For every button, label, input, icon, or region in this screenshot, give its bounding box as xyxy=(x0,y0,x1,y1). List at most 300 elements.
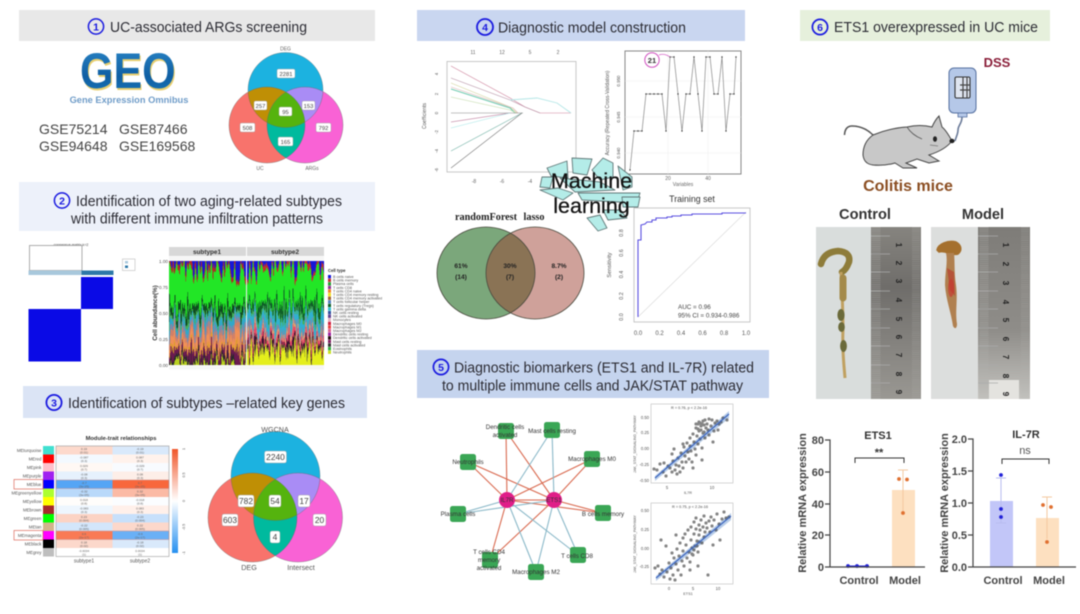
scatter plot: IL7R vs JAK/STAT: 0.50 xyxy=(641,415,650,420)
heatmap: module-trait relationships: (0.3) xyxy=(137,459,143,463)
line chart: RFE accuracy xyxy=(605,51,741,188)
photo: control colon with ruler: 8 xyxy=(894,372,903,377)
venn: DEG, UC, ARGs: DEG xyxy=(280,46,291,52)
heading 3 xyxy=(23,386,367,418)
line chart: lasso coefficients: 5 xyxy=(529,50,532,56)
heatmap: module-trait relationships: -0.6 xyxy=(137,532,143,536)
scatter plot: IL7R vs JAK/STAT: 5 xyxy=(666,485,669,490)
icon: machine learning brain: learning xyxy=(553,194,630,218)
bar chart: IL-7R xyxy=(939,429,1076,587)
venn: WGCNA, DEG, Intersect: 17 xyxy=(299,496,309,506)
dataset accession list: GSE169568 xyxy=(119,138,195,154)
ROC curve: training set: 0.2 xyxy=(619,292,625,300)
photo: control colon with ruler: 9 xyxy=(894,390,903,395)
line chart: lasso coefficients: -8 xyxy=(472,179,476,185)
network diagram: biomarkers and immune cells: Neutrophils xyxy=(452,459,484,466)
bar chart: IL-7R: 2.0 xyxy=(952,434,967,446)
venn: DEG, UC, ARGs xyxy=(229,46,343,172)
ROC curve: training set: 0.6 xyxy=(698,331,707,337)
photo: model colon with ruler: 2 xyxy=(1001,262,1010,267)
venn: randomForest vs lasso: 30% xyxy=(503,263,517,270)
venn: WGCNA, DEG, Intersect: 20 xyxy=(315,515,324,525)
photo: control colon with ruler: 2 xyxy=(894,261,903,266)
scatter plot: ETS1 vs JAK/STAT: R = 0.75, p < 2.2e-16 xyxy=(672,505,708,509)
icon: machine learning brain: Machine xyxy=(551,169,632,193)
bar chart: IL-7R: IL-7R xyxy=(1012,429,1040,441)
heatmap: module-trait relationships: MEred xyxy=(29,456,42,462)
network diagram: biomarkers and immune cells: Macrophages M0 xyxy=(568,456,616,463)
panel 1: UC-associated ARGs screening xyxy=(19,10,375,172)
photo: model colon with ruler xyxy=(931,207,1030,399)
heatmap: module-trait relationships: -0.22 xyxy=(80,524,88,528)
heading 6: 6 xyxy=(817,22,823,34)
heatmap: module-trait relationships: -0.7 xyxy=(81,481,87,485)
venn: randomForest vs lasso: 61% xyxy=(454,263,468,270)
legend: cell type: B cells memory xyxy=(333,279,358,283)
scatter plot: IL7R vs JAK/STAT: 0.25 xyxy=(641,430,650,435)
network diagram: biomarkers and immune cells: activated xyxy=(493,432,518,439)
scatter plot: ETS1 vs JAK/STAT: ETS1 xyxy=(683,592,693,596)
scatter plot: IL7R vs JAK/STAT: 10 xyxy=(710,485,715,490)
heatmap: module-trait relationships: (0.004) xyxy=(135,518,145,522)
bar chart: ETS1: 20 xyxy=(812,530,824,542)
line chart: lasso coefficients: 4 xyxy=(434,72,439,75)
heatmap: module-trait relationships: 0.08 xyxy=(137,472,143,476)
photo: control colon with ruler: 4 xyxy=(894,298,903,303)
dataset accession list: GSE87466 xyxy=(119,121,188,137)
stacked bar chart: cell abundance: 0.75 xyxy=(159,285,168,290)
heading 2: with different immune infiltration patterns xyxy=(70,212,323,228)
venn: WGCNA, DEG, Intersect: 2240 xyxy=(266,452,285,462)
heatmap: module-trait relationships: (0.02) xyxy=(136,544,144,548)
photo: model colon with ruler: 6 xyxy=(1001,337,1010,342)
stacked bar chart: cell abundance: subtype2 xyxy=(271,249,299,256)
heatmap: module-trait relationships: MEpurple xyxy=(23,474,42,478)
legend: cell type: T cells regulatory (Tregs) xyxy=(333,304,374,308)
heatmap: module-trait relationships: -0.018 xyxy=(136,498,145,502)
line chart: RFE accuracy: 0.950 xyxy=(616,75,621,86)
heatmap: module-trait relationships: (0.02) xyxy=(80,544,88,548)
network diagram: biomarkers and immune cells: Plasma cells xyxy=(441,511,475,518)
heading 5: Diagnostic biomarkers (ETS1 and IL-7R) related xyxy=(454,360,754,376)
legend: cell type: Cell type xyxy=(328,268,346,273)
heatmap: module-trait relationships: (0.3) xyxy=(81,459,87,463)
network diagram: biomarkers and immune cells: activated xyxy=(477,565,502,572)
heading 6 xyxy=(800,10,1050,41)
venn: randomForest vs lasso: randomForest xyxy=(455,212,518,223)
bar chart: ETS1: Model xyxy=(889,575,921,587)
network diagram: biomarkers and immune cells: Macrophages M2 xyxy=(512,569,560,576)
line chart: RFE accuracy: Accuracy (Repeated Cross-Validation) xyxy=(605,70,611,155)
legend: cell type: T cells CD4 memory activated xyxy=(333,297,382,301)
legend: cell type: T cells follicular helper xyxy=(333,300,370,304)
scatter plot: ETS1 vs JAK/STAT: 0.50 xyxy=(641,508,650,513)
scatter plot: IL7R vs JAK/STAT: -0.50 xyxy=(639,478,650,483)
venn: randomForest vs lasso: (2) xyxy=(555,274,563,281)
venn: WGCNA, DEG, Intersect: WGCNA xyxy=(261,425,289,434)
venn: DEG, UC, ARGs: 257 xyxy=(256,104,265,110)
legend: cell type: B cells naive xyxy=(333,275,354,279)
photo: model colon with ruler: 4 xyxy=(1001,300,1010,305)
venn: WGCNA, DEG, Intersect: 782 xyxy=(239,496,253,506)
photo: model colon with ruler: 5 xyxy=(1001,318,1010,323)
panel 2: aging-related subtypes xyxy=(19,182,383,369)
line chart: RFE accuracy: Variables xyxy=(673,182,694,188)
heading 6: ETS1 overexpressed in UC mice xyxy=(834,20,1038,36)
network diagram: biomarkers and immune cells: IL7R xyxy=(500,497,514,504)
ROC curve: training set: 1.0 xyxy=(742,331,751,337)
heatmap: module-trait relationships: (1) xyxy=(82,552,86,556)
venn: WGCNA, DEG, Intersect: 4 xyxy=(273,532,278,542)
ROC curve: training set: AUC = 0.96 xyxy=(678,304,711,311)
scatter plot: ETS1 vs JAK/STAT: 5 xyxy=(692,586,695,591)
heatmap: module-trait relationships: (0.7) xyxy=(81,468,87,472)
legend: cell type: T cells CD8 xyxy=(333,286,352,290)
photo: model colon with ruler: Model xyxy=(962,207,1004,223)
heatmap: module-trait relationships: -0.32 xyxy=(80,490,88,494)
legend: cell type: Dendritic cells activated xyxy=(333,336,372,340)
heatmap: module-trait relationships: (2e-17) xyxy=(79,536,89,540)
legend: cell type: Monocytes xyxy=(333,318,351,322)
venn: DEG, UC, ARGs: 153 xyxy=(304,104,313,110)
line chart: RFE accuracy: 0.940 xyxy=(616,147,621,158)
line chart: lasso coefficients: -4 xyxy=(528,179,532,185)
ROC curve: training set: 0.8 xyxy=(720,331,729,337)
ROC curve: training set: 0.6 xyxy=(619,249,625,257)
photo: model colon with ruler: 1 xyxy=(1001,243,1010,248)
stacked bar chart: cell abundance xyxy=(152,246,383,369)
scatter plot: IL7R vs JAK/STAT: 0.00 xyxy=(641,446,650,451)
heatmap: module-trait relationships: -0.23 xyxy=(136,515,144,519)
legend: cell type: NK cells resting xyxy=(333,311,359,315)
heatmap: module-trait relationships: 0.5 xyxy=(182,472,186,478)
bar chart: ETS1: 60 xyxy=(812,467,824,479)
heading 2 xyxy=(19,182,375,231)
heatmap: module-trait relationships: (2e-17) xyxy=(135,536,145,540)
network diagram: biomarkers and immune cells: Dendritic cells xyxy=(486,424,524,431)
legend: cell type: Plasma cells xyxy=(333,282,354,286)
heatmap: module-trait relationships: 0.083 xyxy=(136,506,144,510)
heatmap: module-trait relationships: (0.3) xyxy=(137,476,143,480)
icon: GEO logo: GEO xyxy=(80,43,176,99)
heatmap: module-trait relationships: 0.029 xyxy=(80,464,88,468)
heatmap: module-trait relationships: 0.087 xyxy=(136,456,144,460)
heading 2: Identification of two aging-related subtypes xyxy=(76,194,342,210)
photo: model colon with ruler: 8 xyxy=(1001,374,1010,379)
heatmap: module-trait relationships: MEbrown xyxy=(23,508,42,512)
callout: 21 variables: 21 xyxy=(648,56,657,65)
heatmap: module-trait relationships: MEblue xyxy=(27,482,42,487)
heatmap: module-trait relationships: MEtan xyxy=(29,524,42,530)
ROC curve: training set: Sensitivity xyxy=(607,252,613,278)
heatmap: module-trait relationships: (3e-25) xyxy=(135,484,145,488)
line chart: lasso coefficients: 2 xyxy=(557,50,560,56)
bar chart: ETS1: 80 xyxy=(812,435,824,447)
line chart: RFE accuracy: 0.945 xyxy=(616,111,621,122)
network diagram: biomarkers and immune cells: T cells CD4 xyxy=(473,549,505,556)
venn: DEG, UC, ARGs: 2281 xyxy=(280,72,292,78)
heading 3: 3 xyxy=(51,398,57,410)
heatmap: module-trait relationships: -0.029 xyxy=(136,464,145,468)
dataset accession list: GSE75214 xyxy=(39,121,108,137)
venn: WGCNA, DEG, Intersect xyxy=(208,425,342,572)
legend: cell type: Macrophages M1 xyxy=(333,325,362,329)
legend: cell type: Macrophages M2 xyxy=(333,329,362,333)
heading 3: Identification of subtypes –related key genes xyxy=(68,396,345,412)
venn: randomForest vs lasso: lasso xyxy=(524,212,544,223)
photo: control colon with ruler: 3 xyxy=(894,279,903,284)
heatmap: module-trait relationships: 1 xyxy=(182,448,186,450)
ROC curve: training set: Training set xyxy=(669,194,715,204)
consensus matrix heatmap xyxy=(28,243,135,362)
line chart: lasso coefficients: Coefficients xyxy=(422,102,428,129)
panel 3: subtype-related key genes xyxy=(11,386,367,572)
heading 5 xyxy=(417,350,769,398)
scatter plot: IL7R vs JAK/STAT xyxy=(633,404,733,495)
bar chart: IL-7R: ns xyxy=(1019,445,1031,457)
legend: cell type: Neutrophils xyxy=(333,351,352,355)
heatmap: module-trait relationships: 0 xyxy=(182,500,186,502)
heatmap: module-trait relationships xyxy=(11,436,186,564)
heatmap: module-trait relationships: MEgreenyellow xyxy=(11,490,42,496)
heatmap: module-trait relationships: (3e-25) xyxy=(79,484,89,488)
stacked bar chart: cell abundance: 1.00 xyxy=(159,259,168,264)
heading 5: to multiple immune cells and JAK/STAT pathway xyxy=(442,378,744,394)
bar chart: ETS1 xyxy=(797,430,925,587)
bar chart: IL-7R: Relative mRNA expression xyxy=(939,433,951,573)
line chart: lasso coefficients: -2 xyxy=(434,129,439,134)
heatmap: module-trait relationships: Module-trait relationships xyxy=(86,436,156,442)
legend: cell type: T cells gamma delta xyxy=(333,307,367,311)
network diagram: biomarkers and immune cells: memory xyxy=(478,557,501,564)
legend: cell type: Macrophages M0 xyxy=(333,322,362,326)
bar chart: ETS1: ETS1 xyxy=(864,430,892,442)
network diagram: biomarkers and immune cells: T cells CD8 xyxy=(561,553,593,560)
stacked bar chart: cell abundance: 0.50 xyxy=(159,311,168,316)
legend: cell type: Mast cells activated xyxy=(333,343,365,347)
ROC curve: training set: 0.0 xyxy=(634,331,643,337)
bar chart: IL-7R: Model xyxy=(1033,575,1065,587)
heatmap: module-trait relationships: (0.7) xyxy=(137,468,143,472)
scatter plot: ETS1 vs JAK/STAT xyxy=(633,503,733,596)
heatmap: module-trait relationships: MEmagenta xyxy=(18,533,42,538)
heading 5: 5 xyxy=(438,362,444,374)
network diagram: biomarkers and immune cells: B cells memory xyxy=(582,511,625,518)
bar chart: IL-7R: 0.0 xyxy=(952,562,967,574)
photo: model colon with ruler: 7 xyxy=(1001,355,1010,360)
heading 2: 2 xyxy=(59,196,65,208)
heatmap: module-trait relationships: -0.0034 xyxy=(79,549,90,553)
dataset accession list xyxy=(39,121,195,154)
venn: WGCNA, DEG, Intersect: DEG xyxy=(241,563,257,572)
heatmap: module-trait relationships: (0.005) xyxy=(135,527,145,531)
heatmap: module-trait relationships: MEpink xyxy=(27,465,42,470)
heatmap: module-trait relationships: 0.32 xyxy=(137,490,143,494)
dataset accession list: GSE94648 xyxy=(39,138,108,154)
legend: cell type: Mast cells resting xyxy=(333,340,362,344)
heatmap: module-trait relationships: MEgreen xyxy=(24,516,42,521)
icon: mouse with DSS bag: Colitis mice xyxy=(863,178,953,195)
venn: DEG, UC, ARGs: ARGs xyxy=(305,166,319,172)
heatmap: module-trait relationships: (0.8) xyxy=(81,502,87,506)
scatter plot: ETS1 vs JAK/STAT: -0.25 xyxy=(639,564,650,569)
bar chart: ETS1: ** xyxy=(875,447,884,459)
heatmap: module-trait relationships: -0.5 xyxy=(182,524,186,530)
photo: control colon with ruler xyxy=(816,207,921,399)
heatmap: module-trait relationships: (3e-05) xyxy=(135,493,145,497)
scatter plot: ETS1 vs JAK/STAT: 0 xyxy=(668,586,671,591)
venn: DEG, UC, ARGs: UC xyxy=(256,166,264,172)
scatter plot: ETS1 vs JAK/STAT: 0.00 xyxy=(641,546,650,551)
bar chart: ETS1: Control xyxy=(839,575,879,587)
icon: GEO logo: Gene Expression Omnibus xyxy=(70,95,188,105)
ROC curve: training set: 95% CI = 0.934-0.986 xyxy=(678,312,740,320)
heatmap: module-trait relationships: -0.18 xyxy=(136,540,144,544)
scatter plot: IL7R vs JAK/STAT: R = 0.76, p < 2.2e-16 xyxy=(671,406,707,410)
panel 5: diagnostic biomarkers xyxy=(417,350,769,596)
icon: machine learning brain xyxy=(540,158,640,231)
heatmap: module-trait relationships: 0.19 xyxy=(81,447,87,451)
bar chart: IL-7R: Control xyxy=(983,575,1023,587)
stacked bar chart: cell abundance: subtype1 xyxy=(193,249,221,256)
scatter plot: ETS1 vs JAK/STAT: 10 xyxy=(716,586,721,591)
scatter plot: IL7R vs JAK/STAT: IL7R xyxy=(684,491,692,495)
heatmap: module-trait relationships: -1 xyxy=(182,551,186,555)
heatmap: module-trait relationships: (1) xyxy=(138,552,142,556)
icon: mouse with DSS bag xyxy=(844,55,1011,195)
line chart: lasso coefficients xyxy=(422,50,576,185)
venn: WGCNA, DEG, Intersect: Intersect xyxy=(287,563,315,572)
stacked bar chart: cell abundance: 0.00 xyxy=(159,363,168,368)
panel 4: diagnostic model construction xyxy=(417,10,751,337)
heatmap: module-trait relationships: (3e-05) xyxy=(79,493,89,497)
consensus matrix heatmap: consensus matrix k=2 xyxy=(54,243,88,247)
photo: control colon with ruler: 7 xyxy=(894,353,903,358)
heatmap: module-trait relationships: -0.087 xyxy=(80,456,89,460)
venn: randomForest vs lasso: (7) xyxy=(506,274,514,281)
heatmap: module-trait relationships: -0.08 xyxy=(80,472,88,476)
line chart: RFE accuracy: 40 xyxy=(705,176,711,182)
heatmap: module-trait relationships: -0.083 xyxy=(80,506,89,510)
bar chart: IL-7R: 1.5 xyxy=(952,466,967,478)
line chart: lasso coefficients: 12 xyxy=(499,50,505,56)
heatmap: module-trait relationships: MEblack xyxy=(25,542,42,546)
legend: cell type: T cells CD4 memory resting xyxy=(333,293,378,297)
heading 4: 4 xyxy=(482,22,488,34)
heatmap: module-trait relationships: (0.005) xyxy=(79,527,89,531)
heatmap: module-trait relationships: 0.7 xyxy=(138,481,142,485)
photo: control colon with ruler: 6 xyxy=(894,335,903,340)
heatmap: module-trait relationships: subtype1 xyxy=(74,558,94,564)
venn: DEG, UC, ARGs: 95 xyxy=(282,110,289,116)
heading 4: Diagnostic model construction xyxy=(498,20,686,36)
scatter plot: ETS1 vs JAK/STAT: 0.25 xyxy=(641,527,650,532)
bar chart: ETS1: 0 xyxy=(818,562,824,574)
heatmap: module-trait relationships: 0.018 xyxy=(80,498,88,502)
photo: control colon with ruler: 5 xyxy=(894,317,903,322)
ROC curve: training set: 0.2 xyxy=(655,331,664,337)
stacked bar chart: cell abundance: Cell abundance(%) xyxy=(152,285,159,341)
venn: randomForest vs lasso xyxy=(437,212,584,319)
bar chart: ETS1: Relative mRNA expression xyxy=(797,433,809,573)
network diagram: biomarkers and immune cells: ETS1 xyxy=(546,497,562,504)
bar chart: ETS1: 40 xyxy=(812,499,824,511)
legend: cell type: Eosinophils xyxy=(333,347,352,351)
photo: model colon with ruler: 9 xyxy=(1001,392,1010,397)
line chart: lasso coefficients: -4 xyxy=(434,148,439,153)
venn: DEG, UC, ARGs: 508 xyxy=(243,126,252,132)
heatmap: module-trait relationships: (0.8) xyxy=(137,502,143,506)
venn: DEG, UC, ARGs: 165 xyxy=(281,140,290,146)
heading 1: UC-associated ARGs screening xyxy=(110,20,307,36)
heatmap: module-trait relationships: (0.004) xyxy=(79,518,89,522)
photo: control colon with ruler: Control xyxy=(839,207,891,223)
bar chart: IL-7R: 1.0 xyxy=(952,498,967,510)
ROC curve: training set: 0.0 xyxy=(619,313,625,321)
panel 6: ETS1 overexpressed in UC mice xyxy=(797,10,1076,587)
heatmap: module-trait relationships: 0.0034 xyxy=(135,549,145,553)
venn: WGCNA, DEG, Intersect: 54 xyxy=(270,496,280,506)
legend: cell type: Dendritic cells resting xyxy=(333,333,368,337)
heading 1: 1 xyxy=(93,22,99,34)
heatmap: module-trait relationships: MEgrey xyxy=(26,550,42,555)
bar chart: IL-7R: 0.5 xyxy=(952,530,967,542)
scatter plot: IL7R vs JAK/STAT: -0.25 xyxy=(639,462,650,467)
heatmap: module-trait relationships: (0.01) xyxy=(80,450,88,454)
heatmap: module-trait relationships: 0.6 xyxy=(82,532,86,536)
heading 1 xyxy=(19,10,375,41)
line chart: lasso coefficients: 0 xyxy=(434,111,439,114)
heatmap: module-trait relationships: (0.3) xyxy=(81,476,87,480)
heatmap: module-trait relationships: (0.3) xyxy=(81,510,87,514)
line chart: lasso coefficients: -6 xyxy=(434,167,439,172)
scatter plot: ETS1 vs JAK/STAT: JAK_STAT_SIGNALING_PATHWAY xyxy=(633,515,637,573)
legend: cell type: T cells CD4 naive xyxy=(333,289,362,293)
legend: cell type xyxy=(328,268,382,355)
venn: WGCNA, DEG, Intersect: 603 xyxy=(223,515,237,525)
heatmap: module-trait relationships: 0.22 xyxy=(137,524,143,528)
ROC curve: training set: 0.4 xyxy=(677,331,686,337)
stacked bar chart: cell abundance: 0.25 xyxy=(159,337,168,342)
heatmap: module-trait relationships: (0.01) xyxy=(136,450,144,454)
heatmap: module-trait relationships: MEturquoise xyxy=(17,448,42,453)
heading 4 xyxy=(417,10,745,41)
photo: control colon with ruler: 1 xyxy=(894,243,903,248)
heatmap: module-trait relationships: (0.3) xyxy=(137,510,143,514)
scatter plot: IL7R vs JAK/STAT: JAK_STAT_SIGNALING_PATHWAY xyxy=(633,415,637,473)
ROC curve: training set: 0.8 xyxy=(619,229,625,237)
icon: GEO logo: GEO xyxy=(81,45,177,101)
heatmap: module-trait relationships: -0.19 xyxy=(136,447,144,451)
line chart: lasso coefficients: 2 xyxy=(434,92,439,95)
network diagram: biomarkers and immune cells xyxy=(441,422,625,580)
line chart: lasso coefficients: -6 xyxy=(500,179,504,185)
ROC curve: training set xyxy=(607,194,751,337)
venn: randomForest vs lasso: 8.7% xyxy=(551,263,567,270)
heatmap: module-trait relationships: 0.23 xyxy=(81,515,87,519)
heatmap: module-trait relationships: 0.18 xyxy=(81,540,87,544)
heatmap: module-trait relationships: subtype2 xyxy=(130,558,150,564)
network diagram: biomarkers and immune cells: Mast cells resting xyxy=(528,428,576,435)
heatmap: module-trait relationships: MEyellow xyxy=(23,499,42,504)
legend: cell type: NK cells activated xyxy=(333,315,362,319)
photo: model colon with ruler: 3 xyxy=(1001,281,1010,286)
line chart: RFE accuracy: 20 xyxy=(665,176,671,182)
icon: mouse with DSS bag: DSS xyxy=(984,55,1011,70)
venn: randomForest vs lasso: (14) xyxy=(455,274,467,281)
venn: DEG, UC, ARGs: 792 xyxy=(319,126,328,132)
ROC curve: training set: 0.4 xyxy=(619,271,625,278)
